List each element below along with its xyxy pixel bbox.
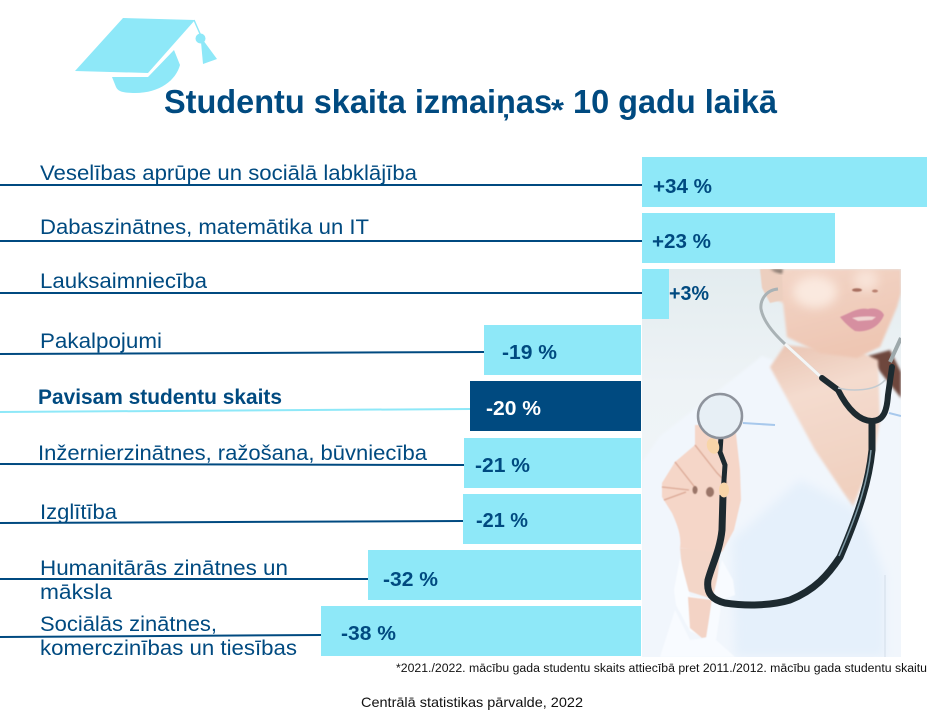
row: total number of students: Pavisam studentu skaits	[38, 385, 282, 409]
row: natural sciences, mathematics and IT: +23 %	[652, 231, 711, 253]
row: humanities and arts: -32 %	[383, 569, 438, 591]
row: health care and social welfare: +34 %	[653, 176, 712, 198]
photo detail: cheek highlight	[793, 276, 837, 308]
row: education: -21 %	[476, 510, 528, 532]
row: agriculture	[0, 269, 709, 319]
photo detail: hand	[662, 425, 741, 552]
photo detail: coat lower panel	[732, 480, 885, 657]
photo detail: face	[778, 269, 901, 358]
photo detail: chest piece	[698, 394, 742, 438]
row: engineering, manufacturing, construction: -21 %	[475, 455, 530, 477]
footnote: *2021./2022. mācību gada studentu skaits attiecībā pret 2011./2012. mācību gada studentu skaitu	[396, 663, 927, 675]
row: agriculture: +3%	[669, 283, 709, 305]
graduation cap icon	[75, 18, 217, 93]
row: humanities and arts: Humanitārās zinātnes un	[40, 556, 288, 580]
row: natural sciences, mathematics and IT	[0, 213, 835, 263]
row: social sciences, business and law: komerczinības un tiesības	[40, 636, 297, 660]
photo detail: stethoscope ear tube	[761, 289, 822, 378]
photo detail: stethoscope connector	[822, 367, 892, 421]
row: education	[0, 494, 641, 544]
row: social sciences, business and law: Sociālās zinātnes,	[40, 612, 217, 636]
row: health care and social welfare: Veselības aprūpe un sociālā labklājība	[40, 161, 417, 185]
row: social sciences, business and law: -38 %	[341, 623, 396, 645]
row: agriculture: Lauksaimniecība	[40, 269, 207, 293]
title: 10 gadu laikā	[573, 84, 777, 121]
photo detail: neck	[770, 345, 880, 507]
row: education: Izglītība	[40, 500, 117, 524]
row: social sciences, business and law	[0, 606, 641, 660]
title	[164, 84, 777, 127]
chart: change in student numbers by field	[0, 157, 927, 660]
source: Centrālā statistikas pārvalde, 2022	[361, 694, 583, 710]
row: natural sciences, mathematics and IT: Dabaszinātnes, matemātika un IT	[40, 215, 369, 239]
title: Studentu skaita izmaiņas	[164, 84, 552, 121]
photo detail: nose	[854, 269, 878, 291]
photo detail: nails	[706, 438, 720, 454]
row: total number of students: -20 %	[486, 398, 541, 420]
row: health care and social welfare	[0, 157, 927, 207]
photo detail: lips	[840, 308, 884, 331]
title: *	[551, 94, 564, 127]
photo: doctor with stethoscope	[642, 269, 901, 657]
photo detail: sleeve cuff	[680, 562, 690, 624]
photo detail: finger creases	[662, 445, 727, 500]
row: humanities and arts	[0, 550, 641, 604]
photo detail: hair	[868, 350, 901, 398]
photo detail: collar piping	[889, 413, 901, 416]
row: engineering, manufacturing, construction: Inžernierzinātnes, ražošana, būvniecība	[38, 441, 427, 465]
row: humanities and arts: māksla	[40, 580, 112, 604]
photo detail: forearm	[680, 548, 720, 600]
photo detail: ear	[760, 269, 783, 303]
photo detail: stethoscope tube	[708, 423, 872, 605]
row: total number of students	[0, 381, 641, 431]
row: services: Pakalpojumi	[40, 329, 162, 353]
photo detail: white coat	[642, 356, 901, 657]
row: services: -19 %	[502, 342, 557, 364]
row: engineering, manufacturing, construction	[0, 438, 641, 488]
row: services	[0, 325, 641, 375]
